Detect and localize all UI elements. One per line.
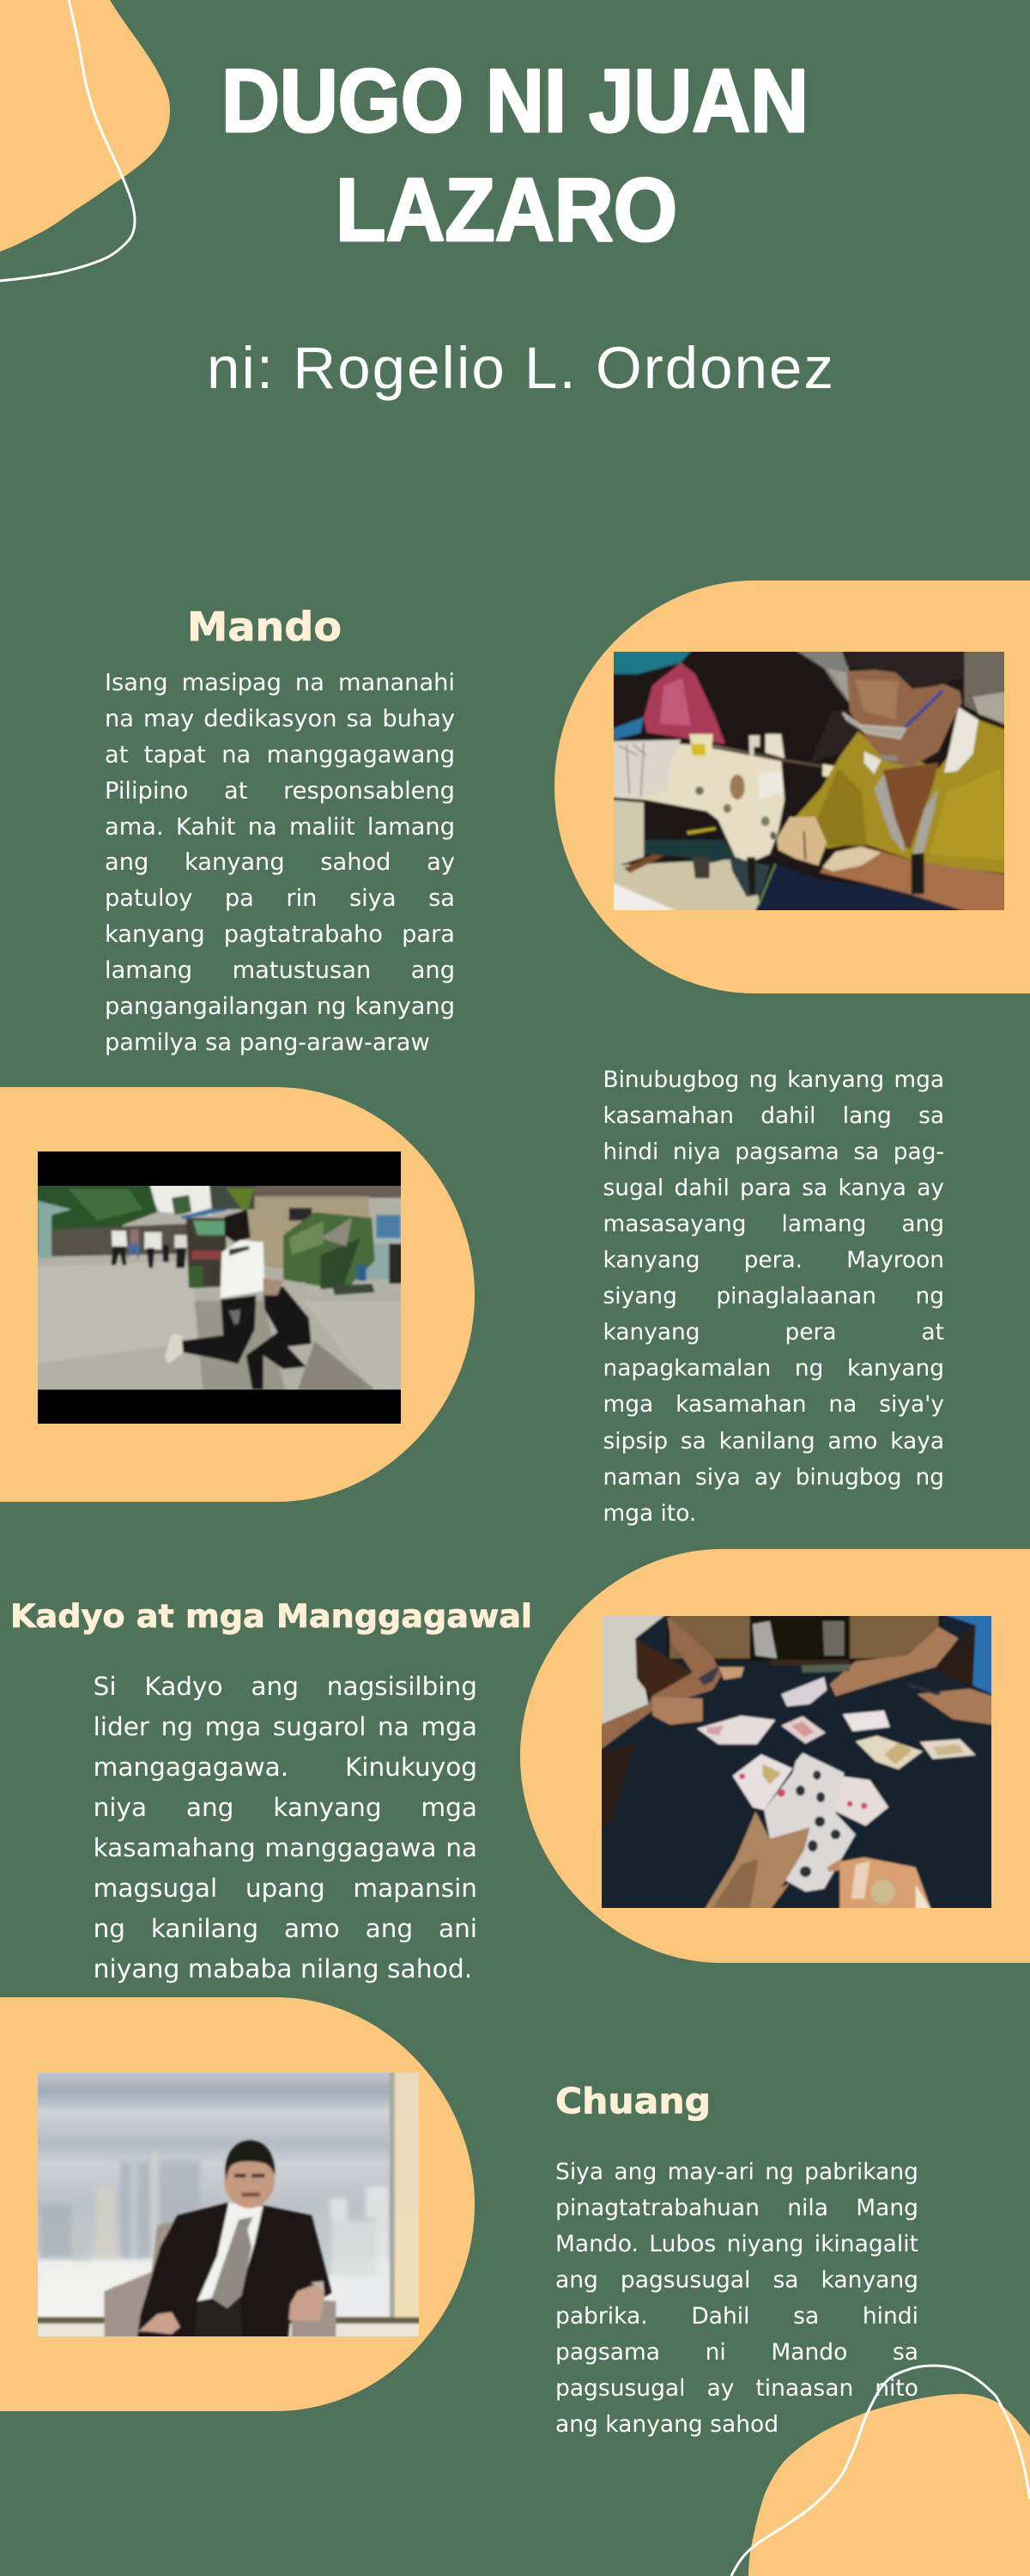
- text block: Kadyo description: magsugal upang mapansin: [94, 1874, 477, 1903]
- text block: Mando description: Isang masipag na mananahi: [105, 670, 455, 696]
- machine: [644, 797, 741, 860]
- text block: Mando being beaten: mga kasamahan na siya'y: [603, 1391, 944, 1418]
- decorative blob: bottom right: [748, 2394, 1030, 2576]
- text block: Mando being beaten: sugal dahil para sa kanya ay: [603, 1175, 944, 1201]
- text block: Kadyo description: kasamahang manggagawa na: [94, 1833, 477, 1862]
- decorative line: bottom right: [730, 2365, 1030, 2576]
- fan of cards in hand: [733, 1754, 793, 1810]
- man: [137, 2202, 331, 2338]
- text block: Mando being beaten: [603, 1066, 944, 1527]
- text block: Mando being beaten: naman siya ay binugbog ng: [603, 1464, 944, 1491]
- bystanders: [112, 1230, 127, 1247]
- text block: Kadyo description: Si Kadyo ang nagsisilbing: [94, 1672, 477, 1701]
- chair: [103, 2221, 175, 2336]
- hands: [288, 2282, 324, 2321]
- text block: Mando description: [105, 670, 455, 1056]
- panel: card game photo on peach shape: [520, 1549, 1030, 1963]
- text block: Chuang description: ang pagsusugal sa kanyang: [555, 2267, 918, 2293]
- text block: Mando being beaten: Binubugbog ng kanyang mga: [603, 1066, 944, 1093]
- skyline: [39, 2154, 390, 2277]
- text block: Chuang description: ang kanyang sahod: [555, 2411, 779, 2438]
- photo: man at sewing machine: [614, 652, 1004, 910]
- fabric and hands: [754, 864, 976, 914]
- text block: Kadyo description: lider ng mga sugarol na mga: [94, 1712, 477, 1741]
- title: LAZARO: [336, 161, 677, 260]
- text block: Chuang description: pabrika. Dahil sa hindi: [555, 2303, 918, 2330]
- text block: Chuang description: pagsusugal ay tinaasan nito: [555, 2375, 918, 2402]
- subtitle: author: ni: Rogelio L. Ordonez: [207, 335, 833, 401]
- title: [221, 52, 809, 260]
- photo: businessman seated by window: [38, 2073, 419, 2336]
- text block: Mando description: ama. Kahit na maliit lamang: [105, 814, 455, 841]
- text block: Mando being beaten: napagkamalan ng kanyang: [603, 1355, 944, 1382]
- text block: Chuang description: pagsama ni Mando sa: [555, 2339, 918, 2366]
- tools: [624, 839, 685, 872]
- text block: Kadyo description: niya ang kanyang mga: [94, 1793, 477, 1822]
- panel: Mando photo on peach shape: [554, 580, 1030, 993]
- photo: men playing cards: [602, 1616, 991, 1908]
- text block: Mando description: pangangailangan ng kanyang: [105, 993, 455, 1020]
- heading: Mando: Mando: [187, 604, 342, 650]
- heading: Kadyo at mga Manggagawal: Kadyo at mga Manggagawal: [10, 1598, 532, 1635]
- man: [796, 720, 1010, 874]
- text block: Chuang description: pinagtatrabahuan nila Mang: [555, 2195, 918, 2221]
- text block: Mando description: na may dedikasyon sa buhay: [105, 706, 455, 732]
- text block: Kadyo description: [94, 1672, 477, 1984]
- text block: Mando description: at tapat na manggagawang: [105, 742, 455, 769]
- building and stall: [252, 1186, 401, 1199]
- text block: Mando description: pamilya sa pang-araw-araw: [105, 1030, 430, 1056]
- text block: Chuang description: [555, 2159, 918, 2438]
- text block: Kadyo description: niyang mababa nilang sahod.: [94, 1954, 472, 1984]
- text block: Mando being beaten: kasamahan dahil lang sa: [603, 1103, 944, 1129]
- heading: Chuang: Chuang: [555, 2081, 711, 2122]
- text block: Mando description: kanyang pagtatrabaho para: [105, 921, 455, 948]
- text block: Mando description: ang kanyang sahod ay: [105, 849, 455, 876]
- photo: men fighting on the street: [38, 1151, 401, 1424]
- text block: Mando being beaten: kanyang pera. Mayroon: [603, 1247, 944, 1273]
- text block: Mando being beaten: mga ito.: [603, 1500, 696, 1527]
- text block: Mando description: Pilipino at responsableng: [105, 778, 455, 805]
- text block: Mando description: lamang matustusan ang: [105, 957, 455, 984]
- text block: Mando being beaten: hindi niya pagsama sa pag-: [603, 1139, 944, 1165]
- text block: Mando description: patuloy pa rin siya sa: [105, 885, 455, 912]
- decorative blob: top left: [0, 0, 170, 252]
- cards on the table: [697, 1716, 776, 1744]
- text block: Mando being beaten: masasayang lamang ang: [603, 1211, 944, 1237]
- fighters: [225, 1209, 251, 1242]
- panel: Chuang photo on peach shape: [0, 1997, 475, 2411]
- hand and money: [704, 1812, 809, 1911]
- window frame: [390, 2069, 395, 2321]
- text block: Mando being beaten: siyang pinaglalaanan ng: [603, 1283, 944, 1309]
- text block: Chuang description: Mando. Lubos niyang ikinagalit: [555, 2231, 918, 2257]
- text block: Chuang description: Siya ang may-ari ng pabrikang: [555, 2159, 918, 2185]
- title: DUGO NI JUAN: [221, 52, 809, 151]
- text block: Kadyo description: mangagagawa. Kinukuyog: [94, 1753, 477, 1782]
- text block: Kadyo description: ng kanilang amo ang ani: [94, 1914, 477, 1943]
- decorative line: top left: [0, 0, 136, 282]
- text block: Mando being beaten: kanyang pera at: [603, 1319, 944, 1346]
- text block: Mando being beaten: sipsip sa kanilang amo kaya: [603, 1427, 944, 1455]
- panel: fight photo on peach shape: [0, 1087, 475, 1502]
